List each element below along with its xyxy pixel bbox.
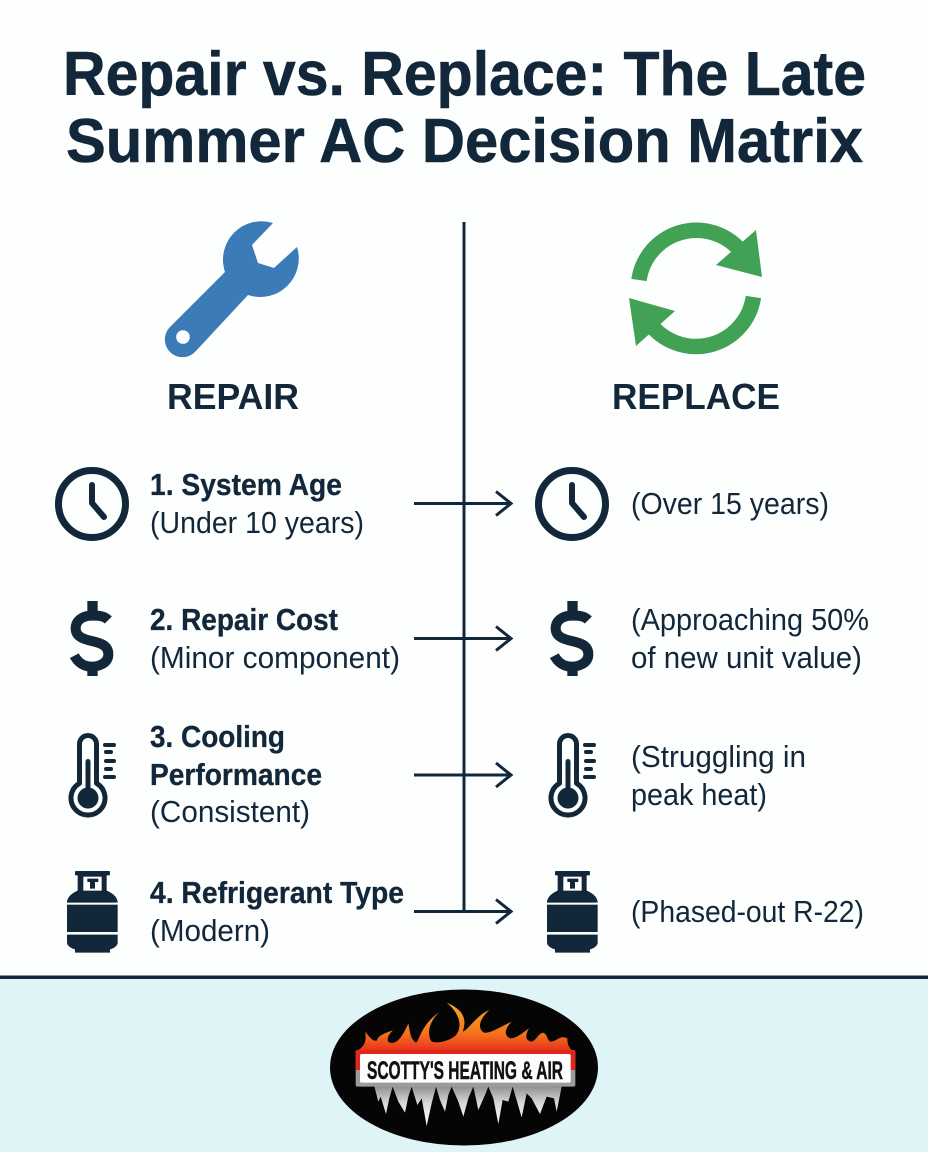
- title: Repair vs. Replace: The Late: [63, 40, 866, 109]
- arrow: [414, 626, 511, 650]
- text: repair cost repair: 2. Repair Cost: [150, 602, 338, 637]
- arrow: [414, 492, 511, 516]
- row 4: refrigerant type: [67, 871, 864, 953]
- text: system age replace: (Over 15 years): [631, 486, 829, 521]
- text: repair cost replace: of new unit value): [631, 640, 862, 675]
- icon: thermometer replace: [551, 736, 594, 815]
- flames: [356, 1003, 575, 1055]
- text: cooling performance repair: (Consistent): [150, 794, 310, 829]
- icon: clock replace: [538, 470, 606, 538]
- icon: tank repair: [67, 871, 118, 953]
- text: repair cost repair: (Minor component): [150, 640, 400, 675]
- text: cooling performance repair: [150, 719, 322, 829]
- footer band: [0, 978, 928, 1152]
- icon: dollar repair: [74, 601, 108, 676]
- icon: thermometer repair: [71, 736, 114, 815]
- arrow: [414, 900, 511, 924]
- heading: replace: REPLACE: [612, 376, 780, 417]
- text: refrigerant type repair: 4. Refrigerant Type: [150, 875, 404, 910]
- text: system age repair: 1. System Age: [150, 467, 342, 502]
- row 2: repair cost: [74, 601, 869, 676]
- title: [63, 40, 866, 176]
- logo text: SCOTTY'S HEATING & AIR: [367, 1057, 563, 1085]
- logo: Scotty's Heating & Air: [330, 990, 598, 1146]
- text: cooling performance replace: peak heat): [631, 777, 767, 812]
- text: refrigerant type repair: [150, 875, 404, 948]
- text: repair cost replace: (Approaching 50%: [631, 602, 869, 637]
- icon: tank replace: [547, 871, 598, 953]
- icicles: [374, 1085, 562, 1126]
- heading: repair: REPAIR: [167, 376, 299, 417]
- icon: replace cycle arrows: [629, 230, 762, 346]
- text: repair cost repair: [150, 602, 400, 675]
- icon: wrench: [165, 221, 299, 357]
- title: Summer AC Decision Matrix: [66, 107, 863, 176]
- icon: dollar replace: [554, 601, 588, 676]
- arrow: [414, 763, 511, 787]
- text: refrigerant type replace: (Phased-out R-22): [631, 894, 864, 929]
- text: repair cost replace: [631, 602, 869, 675]
- label plate: [356, 1050, 575, 1087]
- text: cooling performance repair: 3. Cooling: [150, 719, 285, 754]
- text: system age repair: (Under 10 years): [150, 505, 364, 540]
- text: refrigerant type repair: (Modern): [150, 913, 270, 948]
- text: cooling performance replace: (Struggling in: [631, 739, 806, 774]
- row 3: cooling performance: [71, 719, 806, 829]
- row 1: system age: [58, 467, 829, 540]
- text: cooling performance repair: Performance: [150, 757, 322, 792]
- text: system age repair: [150, 467, 364, 540]
- text: cooling performance replace: [631, 739, 806, 812]
- icon: clock repair: [58, 470, 126, 538]
- center divider line: [462, 222, 466, 913]
